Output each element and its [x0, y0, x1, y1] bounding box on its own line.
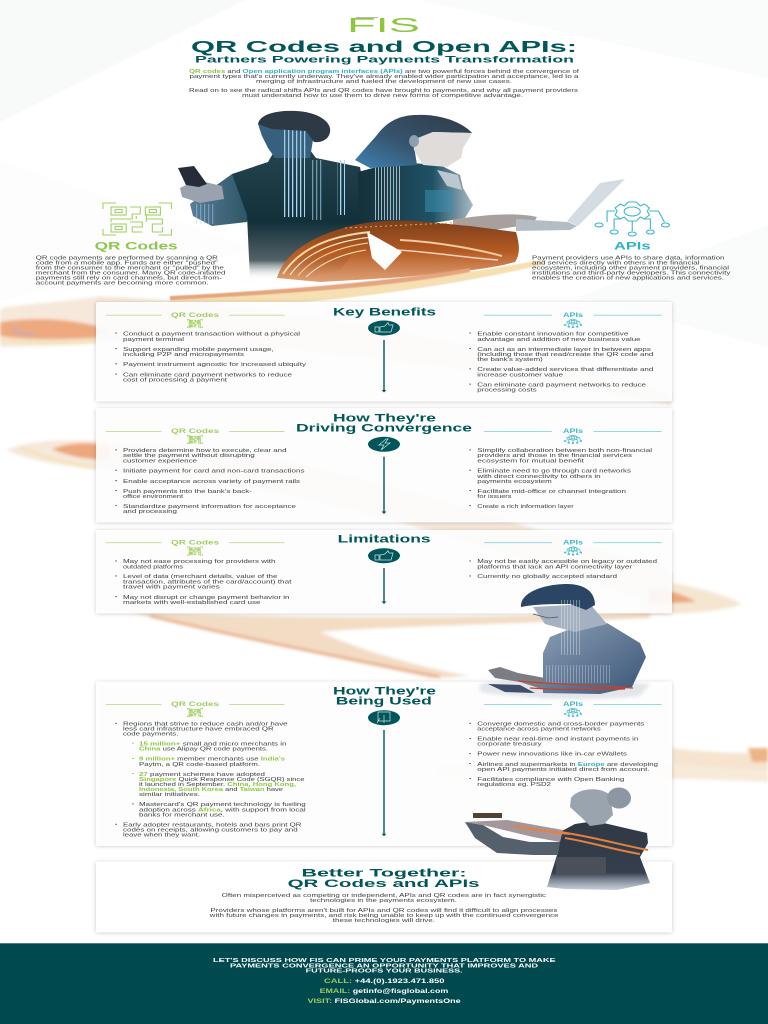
list: QR convergence	[116, 448, 305, 515]
text: closing paragraph: Providers whose platforms aren't built for APIs and QR codes will find it difficult to align processes	[210, 908, 558, 914]
title: Partners Powering Payments Transformation	[195, 54, 574, 66]
list: QR usage: adoption across Africa , with support from local	[139, 807, 306, 813]
list: QR usage	[116, 722, 306, 838]
column header: APIs	[484, 701, 662, 717]
intro text: merging of infrastructure and fueled the development of new use cases.	[256, 79, 513, 85]
illustration: man and woman back to back with highway	[170, 111, 625, 302]
column header: QR Codes: QR Codes	[171, 701, 220, 708]
column header: APIs: APIs	[563, 701, 584, 708]
woman face	[413, 132, 472, 167]
list: QR benefits: Conduct a payment transaction without a physical	[123, 332, 300, 338]
panel: better together	[96, 862, 672, 932]
highway light trail	[170, 260, 545, 302]
heading: how they're being used: How They're	[333, 686, 436, 698]
list: API convergence: Create a rich information layer	[477, 504, 574, 510]
list: QR usage: codes on receipts, allowing customers to pay and	[123, 828, 298, 834]
list: QR benefits	[116, 332, 306, 383]
list: API convergence: providers and those in the financial services	[477, 453, 632, 459]
man hand and phone	[178, 166, 224, 203]
list: API limitations	[470, 559, 657, 580]
panel: driving convergence	[96, 408, 672, 522]
intro text	[189, 69, 580, 99]
list: API usage	[470, 722, 658, 788]
woman building lights	[374, 162, 462, 220]
list: QR usage: Regions that strive to reduce cash and/or have	[123, 722, 288, 728]
column header: APIs	[484, 539, 662, 555]
list: QR usage: less card infrastructure have embraced QR	[123, 726, 274, 732]
icon: API gear network large	[595, 202, 669, 236]
heading: better together: Better Together:	[302, 868, 466, 880]
list: API usage: Enable near real-time and instant payments in	[477, 736, 638, 742]
text: closing paragraph	[208, 893, 559, 924]
column header: APIs: APIs	[563, 428, 584, 435]
text: API description: enables the creation of new applications and services.	[532, 276, 725, 282]
list: QR convergence: Enable acceptance across variety of payment rails	[123, 479, 300, 485]
arrow: timeline	[382, 340, 386, 392]
text: closing paragraph: these technologies will drive.	[333, 918, 436, 924]
laptop	[516, 179, 625, 231]
list: QR usage: Mastercard's QR payment technology is fueling	[139, 802, 306, 808]
list: QR benefits: including P2P and micropayments	[123, 352, 244, 358]
woman body	[358, 162, 473, 225]
list: API usage: open API payments initiated direct from account.	[477, 767, 650, 773]
arrow: timeline	[382, 568, 386, 604]
list: API benefits: Create value-added services that differentiate and	[477, 367, 653, 373]
footer contact details: EMAIL: getinfo@fisglobal.com	[320, 988, 449, 995]
arrow: timeline	[382, 730, 386, 836]
list: QR usage: code payments.	[123, 732, 179, 738]
background: light-trail road streaks	[0, 296, 768, 782]
intro text: must understand how to use them to drive new forms of competitive advantage.	[242, 93, 524, 99]
list: API convergence: ecosystem for mutual benefit	[477, 458, 585, 464]
text: API description: institutions and third-party developers. This connectivity	[532, 270, 731, 276]
list: QR usage: China use Alipay QR code payments.	[139, 746, 269, 752]
list: QR limitations	[116, 559, 292, 606]
intro text: payment types that's currently underway. They've already enabled wider participation and acceptance, led to a	[190, 74, 580, 80]
text: QR code description: from the consumer to the merchant or "pulled" by the	[36, 266, 224, 272]
list: API convergence: for issuers	[477, 494, 512, 500]
list: API benefits: advantage and addition of new business value	[477, 337, 641, 343]
list: API benefits: processing costs	[477, 387, 537, 393]
woman forearm	[453, 214, 537, 232]
highway road	[277, 221, 519, 282]
icon: thumbs badge	[368, 548, 400, 563]
footer contact details: VISIT: FISGlobal.com/PaymentsOne	[308, 998, 462, 1005]
heading: better together: QR Codes and APIs	[288, 878, 480, 890]
list: API limitations: platforms that lack an API connectivity layer	[477, 564, 632, 570]
list: API benefits: increase customer value	[477, 372, 563, 378]
heading: APIs: APIs	[614, 240, 651, 252]
list: QR limitations: travel with payment varies	[123, 585, 220, 591]
list: QR benefits: Can eliminate card payment networks to reduce	[123, 372, 292, 378]
footer contact details: CALL: +44.(0).1923.471.850	[324, 978, 445, 985]
list: QR benefits: payment terminal	[123, 337, 184, 343]
heading: key benefits: Key Benefits	[333, 306, 436, 318]
list: QR usage: 9 million+ member merchants use India's	[139, 756, 285, 762]
text: closing paragraph: technologies in the payments ecosystem.	[310, 898, 458, 904]
icon: lightning badge	[368, 437, 400, 452]
bun	[607, 788, 631, 808]
torso	[547, 821, 650, 890]
text: closing paragraph: with future changes in payments, and risk being unable to keep up with the continued convergence	[208, 913, 559, 919]
heading: how they're being used: Being Used	[336, 696, 432, 708]
title: QR Codes and Open APIs:	[191, 39, 577, 56]
icon: thumbs up badge	[368, 320, 400, 336]
text: API description: Payment providers use APIs to share data, information	[532, 256, 724, 262]
text: QR code description: QR code payments are performed by scanning a QR	[36, 256, 218, 262]
column header: APIs: APIs	[563, 539, 584, 546]
heading: better together	[288, 868, 480, 890]
lower arm city silhouette	[465, 822, 560, 855]
text: QR code description: account payments are becoming more common.	[36, 280, 209, 286]
list: API usage: Facilitates compliance with Open Banking	[477, 777, 624, 783]
list: QR usage: leave when they want.	[123, 832, 201, 838]
heading: limitations: Limitations	[338, 534, 431, 546]
footer call to action	[213, 958, 556, 975]
intro text: Read on to see the radical shifts APIs and QR codes have brought to payments, and why all payment providers	[189, 88, 578, 94]
body	[543, 623, 646, 694]
list: QR benefits: Payment instrument agnostic for increased ubiquity	[123, 362, 306, 368]
hand and arm	[488, 667, 545, 690]
footer call to action: PAYMENTS CONVERGENCE AN OPPORTUNITY THAT IMPROVES AND	[230, 963, 538, 969]
list: QR usage: 27 payment schemes have adopted	[139, 772, 265, 778]
hair	[521, 584, 595, 610]
list: QR limitations: markets with well-established card use	[123, 600, 260, 606]
orange light trails	[515, 826, 648, 854]
city windows	[545, 600, 610, 683]
text: QR code description: code from a mobile app. Funds are either "pushed"	[36, 260, 218, 266]
logo: FIS: FIS	[347, 15, 420, 37]
man torso	[232, 150, 372, 280]
list: QR convergence: customer experience	[123, 458, 197, 464]
man head and hair	[258, 111, 330, 158]
list: API usage: regulations eg. PSD2	[477, 782, 551, 788]
column header: QR Codes	[106, 428, 284, 444]
list: API convergence: Eliminate need to go through card networks	[477, 468, 631, 474]
panel: key benefits	[96, 302, 672, 402]
heading: how they're driving convergence: Driving Convergence	[296, 423, 472, 435]
panel: limitations	[96, 530, 672, 613]
list: API usage: corporate treasury	[477, 742, 542, 748]
list: API usage: acceptance across payment networks	[477, 726, 601, 732]
head	[570, 789, 613, 826]
list: QR convergence: Standardize payment information for acceptance	[123, 504, 296, 510]
glasses	[533, 614, 558, 618]
arm	[465, 820, 563, 842]
text: QR code description	[36, 256, 225, 286]
list: API benefits: (including those that read/create the QR code and	[477, 352, 653, 358]
list: QR usage: banks for merchant use.	[139, 812, 225, 818]
list: QR benefits: Support expanding mobile payment usage,	[123, 347, 274, 353]
man left sleeve	[190, 174, 255, 226]
credit card	[473, 813, 502, 818]
woman hair	[355, 115, 472, 168]
list: QR usage: it launched in September. China, Hong Kong,	[139, 782, 297, 788]
background facets	[0, 0, 768, 347]
list: API limitations: May not be easily accessible on legacy or outdated	[477, 559, 657, 565]
icon: QR code large	[103, 203, 171, 235]
logo: FIS	[347, 15, 420, 37]
list: API usage: Converge domestic and cross-border payments	[477, 722, 645, 728]
footer call to action: LET'S DISCUSS HOW FIS CAN PRIME YOUR PAYMENTS PLATFORM TO MAKE	[213, 958, 556, 964]
list: API convergence: Facilitate mid-office or channel integration	[477, 489, 626, 495]
column header: QR Codes: QR Codes	[171, 539, 220, 546]
text: QR code description: payments still rely on card channels, but direct-from-	[36, 276, 222, 282]
list: QR usage: Paytm, a QR code-based platform.	[139, 762, 261, 768]
list: API convergence: Simplify collaboration between both non-financial	[477, 448, 652, 454]
illustration: woman holding card	[465, 788, 650, 890]
list: API benefits: Enable constant innovation for competitive	[477, 332, 628, 338]
list: API benefits: Can act as an intermediate layer in between apps	[477, 347, 651, 353]
arrow: timeline	[382, 457, 386, 514]
list: QR convergence: and processing	[123, 509, 177, 515]
footer band	[0, 943, 768, 1024]
heading: QR Codes: QR Codes	[95, 240, 178, 252]
list: QR limitations: transaction, attributes of the card/account) that	[123, 579, 292, 585]
panel: being used	[96, 682, 672, 846]
heading: how they're driving convergence	[296, 413, 472, 435]
column header: APIs	[484, 312, 662, 328]
title	[191, 39, 577, 66]
building at bottom	[556, 857, 606, 874]
list: QR convergence: settle the payment without disrupting	[123, 453, 255, 459]
footer contact details	[308, 978, 462, 1005]
list: QR usage: Singapore Quick Response Code (SGQR) since	[139, 777, 304, 783]
column header: QR Codes: QR Codes	[171, 312, 220, 319]
list: QR limitations: Level of data (merchant details, value of the	[123, 574, 277, 580]
column header: APIs: APIs	[563, 312, 584, 319]
column header: QR Codes: QR Codes	[171, 428, 220, 435]
heading: how they're driving convergence: How They're	[333, 413, 436, 425]
list: QR usage: 15 million+ small and micro merchants in	[139, 742, 286, 748]
list: QR limitations: May not disrupt or change payment behavior in	[123, 595, 290, 601]
man building lights	[194, 132, 345, 224]
list: API convergence: payments ecosystem	[477, 479, 552, 485]
heading: how they're being used	[333, 686, 436, 708]
list: QR usage: similar initiatives.	[139, 792, 201, 798]
red light trails	[518, 681, 633, 690]
list: API limitations: Currently no globally accepted standard	[477, 574, 617, 580]
list: QR limitations: May not ease processing for providers with	[123, 559, 276, 565]
column header: QR Codes	[106, 312, 284, 328]
list: QR usage: Early adopter restaurants, hotels and bars print QR	[123, 822, 302, 828]
illustration: man looking at phone	[480, 584, 650, 699]
list: QR usage: Indonesia, South Korea and Taiwan have	[139, 787, 283, 793]
face and neck	[533, 604, 607, 632]
text: QR code description: merchant from the consumer. Many QR code-initiated	[36, 270, 225, 276]
list: API usage: Power new innovations like in-car eWallets	[477, 752, 627, 758]
text: closing paragraph: Often misperceived as competing or independent, APIs and QR codes are in fact synergistic	[222, 893, 546, 899]
list: QR convergence: office environment	[123, 494, 184, 500]
list: API benefits: Can eliminate card payment networks to reduce	[477, 382, 646, 388]
column header: APIs	[484, 428, 662, 444]
list: API usage: Airlines and supermarkets in Europe are developing	[477, 762, 658, 768]
phone	[488, 684, 535, 693]
intro text: QR codes and Open application program interfaces (APIs) are two powerful forces behind the convergence of	[189, 69, 580, 75]
column header: QR Codes	[106, 539, 284, 555]
column header: QR Codes	[106, 701, 284, 717]
list: QR benefits: cost of processing a payment	[123, 377, 228, 383]
text: API description	[532, 256, 731, 282]
list: QR convergence: Push payments into the bank's back-	[123, 489, 252, 495]
list: QR convergence: Providers determine how to execute, clear and	[123, 448, 286, 454]
text: API description: ecosystem, including other payment providers, financial	[532, 266, 729, 272]
list: QR convergence: Initiate payment for card and non-card transactions	[123, 468, 305, 474]
list: API convergence	[470, 448, 652, 510]
woman ear	[409, 135, 419, 147]
text: API description: and services directly with others in the financial	[532, 260, 700, 266]
list: API convergence: with direct connectivity to others in	[476, 474, 601, 480]
icon: tablet badge	[368, 710, 400, 725]
road fade behind man	[480, 679, 650, 699]
list: QR limitations: outdated platforms	[123, 564, 183, 570]
list: API benefits	[470, 332, 653, 393]
footer call to action: FUTURE-PROOFS YOUR BUSINESS.	[306, 969, 463, 975]
list: API benefits: the bank's system)	[477, 357, 543, 363]
